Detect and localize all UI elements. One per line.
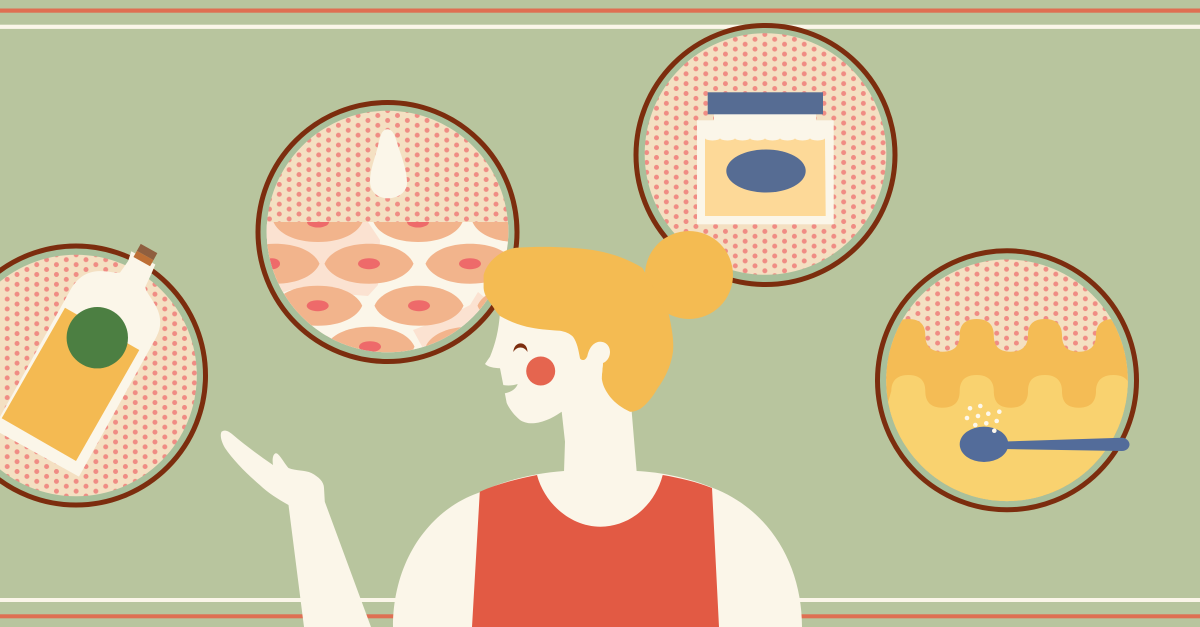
mouth: [499, 384, 518, 394]
face and neck: [485, 312, 637, 472]
panel: honey and spoon circle: [870, 251, 1150, 520]
arm and hand: [221, 431, 371, 627]
hair: [484, 247, 673, 412]
honey layers: [886, 319, 1128, 502]
cheek: [526, 356, 555, 386]
icon: spoon: [960, 427, 1130, 462]
eye: [513, 343, 528, 352]
hair bun: [645, 231, 733, 319]
panel: cream jar circle: [636, 26, 895, 284]
icon: cream drop: [370, 129, 407, 198]
shoulders: [393, 471, 802, 627]
panel: skin cells circle: [256, 100, 520, 364]
top stripes: [0, 8, 1200, 29]
red top: [472, 475, 719, 627]
sugar grains: [965, 404, 1002, 433]
icon: oil bottle: [0, 234, 187, 477]
bottom stripes: [0, 598, 1200, 618]
icon: skin cell layer: [266, 222, 508, 352]
person: woman in red top: [221, 231, 802, 627]
ear: [587, 342, 610, 378]
icon: cream jar: [697, 92, 834, 224]
panel: oil bottle circle: [0, 234, 206, 505]
